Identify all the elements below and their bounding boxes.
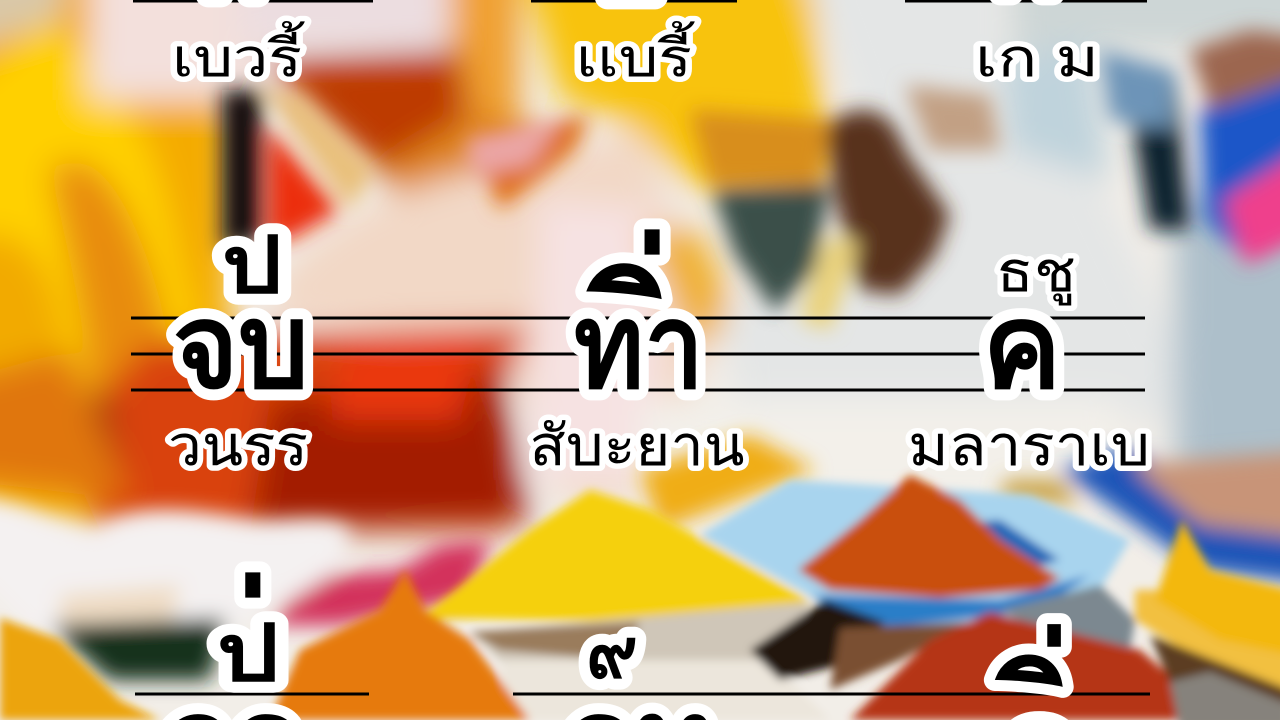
- upper mark: ป: [222, 221, 282, 309]
- bottom row centre: glyphs: [566, 614, 714, 720]
- main glyph: ค: [983, 281, 1061, 413]
- upper mark: ธชู: [996, 240, 1076, 306]
- right white person: [720, 0, 1180, 420]
- orange pile bottom: [270, 570, 530, 720]
- blue plate: [700, 480, 1130, 625]
- top row characters and labels: [172, 0, 1099, 88]
- lower red area: [60, 325, 530, 530]
- label: วนรร: [168, 414, 308, 477]
- left yellow robe: [0, 0, 230, 520]
- label: right: เก ม: [975, 30, 1099, 88]
- top pink-white: [90, 0, 260, 100]
- label: centre: เเบรี้: [576, 21, 695, 88]
- bottom row left: glyphs: [166, 572, 304, 720]
- blue band right: [1060, 450, 1280, 585]
- pink patch: [470, 115, 590, 210]
- main glyph: จบ: [173, 281, 309, 413]
- label: สับะยาน: [530, 414, 744, 477]
- gray base: [1000, 585, 1135, 650]
- white cloth lower left: [0, 490, 350, 650]
- staff lines: top row: [133, 0, 1147, 2]
- upper mark: ป: [217, 609, 279, 697]
- black stripe and red shape: [222, 90, 262, 250]
- staff lines: middle row: [131, 318, 1145, 390]
- upper tick: ่: [245, 572, 261, 598]
- bottom left yellow pile: [0, 618, 160, 720]
- upper mark: ๙: [586, 614, 638, 692]
- dark gap: [750, 600, 885, 680]
- main glyph: ทา: [574, 281, 704, 413]
- label: มลาราเบ: [908, 414, 1150, 477]
- red pile bottom: [850, 612, 1220, 720]
- orange pile: [798, 475, 1060, 598]
- bottom row right: glyphs: [994, 623, 1079, 720]
- middle column centre: main word and label: [530, 229, 744, 477]
- upper mark: ิ่: [586, 229, 662, 299]
- right crowd: [1125, 70, 1190, 230]
- upper mark: ิ่: [994, 623, 1063, 687]
- dark head: [825, 110, 950, 295]
- bowl under yellow pile: [470, 602, 810, 680]
- right bowl: [1135, 590, 1280, 690]
- staff lines: bottom row: [135, 692, 1150, 696]
- label: left: เบวรี้: [172, 21, 305, 88]
- cloth centre: [270, 130, 720, 500]
- dark orange-red band: [260, 50, 470, 190]
- yellow pile: [420, 490, 812, 622]
- yellow top centre: [520, 0, 830, 190]
- middle column left: main word and label: [168, 221, 309, 477]
- middle column right: main word and label: [908, 240, 1150, 477]
